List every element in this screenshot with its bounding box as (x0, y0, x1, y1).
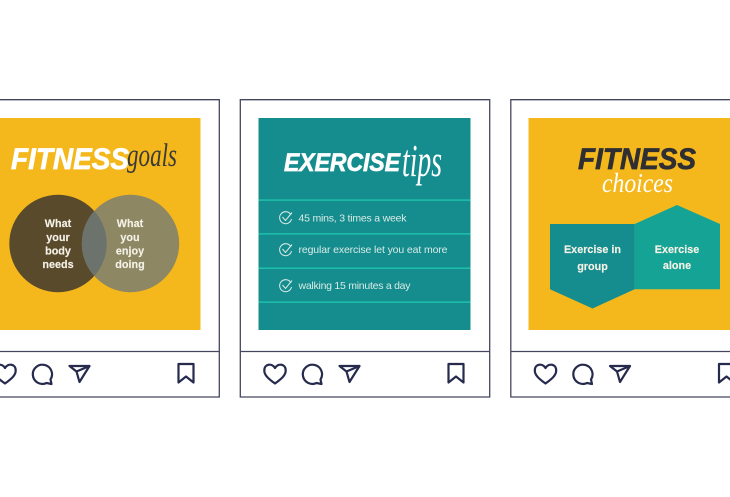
tip rows (258, 199, 470, 303)
venn diagram (9, 195, 179, 292)
yellow image panel (0, 118, 200, 330)
heading: EXERCISE tips (284, 135, 442, 186)
heading: EXERCISE tips: EXERCISE (284, 149, 401, 177)
venn label: your body: your (46, 232, 70, 244)
venn label: you enjoy: doing (115, 259, 145, 271)
shape: exercise in group: group (577, 261, 608, 273)
venn label: you enjoy: What (117, 218, 144, 230)
venn label: you enjoy: enjoy (116, 246, 144, 258)
teal image panel (258, 118, 470, 330)
heading: EXERCISE tips: tips (402, 135, 442, 186)
panel: fitness choices post (511, 100, 730, 397)
venn label: you enjoy: you (120, 232, 140, 244)
shape: exercise in group (550, 224, 635, 308)
post frame (0, 100, 219, 397)
panel: fitness goals post (0, 100, 219, 397)
tip 2: regular exercise let you eat more (298, 244, 448, 256)
heading: FITNESS choices (578, 143, 696, 198)
yellow image panel (528, 118, 730, 330)
shape: exercise in group: Exercise in (564, 244, 621, 256)
post frame (511, 100, 730, 397)
shape: exercise alone (635, 205, 720, 289)
post frame (240, 100, 490, 397)
shape: exercise alone: Exercise (655, 244, 699, 256)
venn label: your body: body (45, 246, 71, 258)
shape: exercise alone: alone (663, 260, 691, 272)
tip 1: 45 mins, 3 times a week (298, 212, 407, 224)
panel: exercise tips post (240, 100, 490, 397)
heading: FITNESS goals: goals (127, 138, 177, 174)
venn label: your body: needs (42, 259, 74, 271)
heading: FITNESS goals (11, 138, 177, 176)
heading: FITNESS choices: choices (602, 168, 673, 198)
heading: FITNESS goals: FITNESS (11, 143, 129, 176)
action icons (535, 364, 730, 384)
heading: FITNESS choices: FITNESS (578, 143, 696, 176)
action icons (264, 364, 464, 384)
venn label: your body: What (45, 218, 72, 230)
action icons (0, 364, 194, 384)
tip 3: walking 15 minutes a day (298, 280, 411, 292)
